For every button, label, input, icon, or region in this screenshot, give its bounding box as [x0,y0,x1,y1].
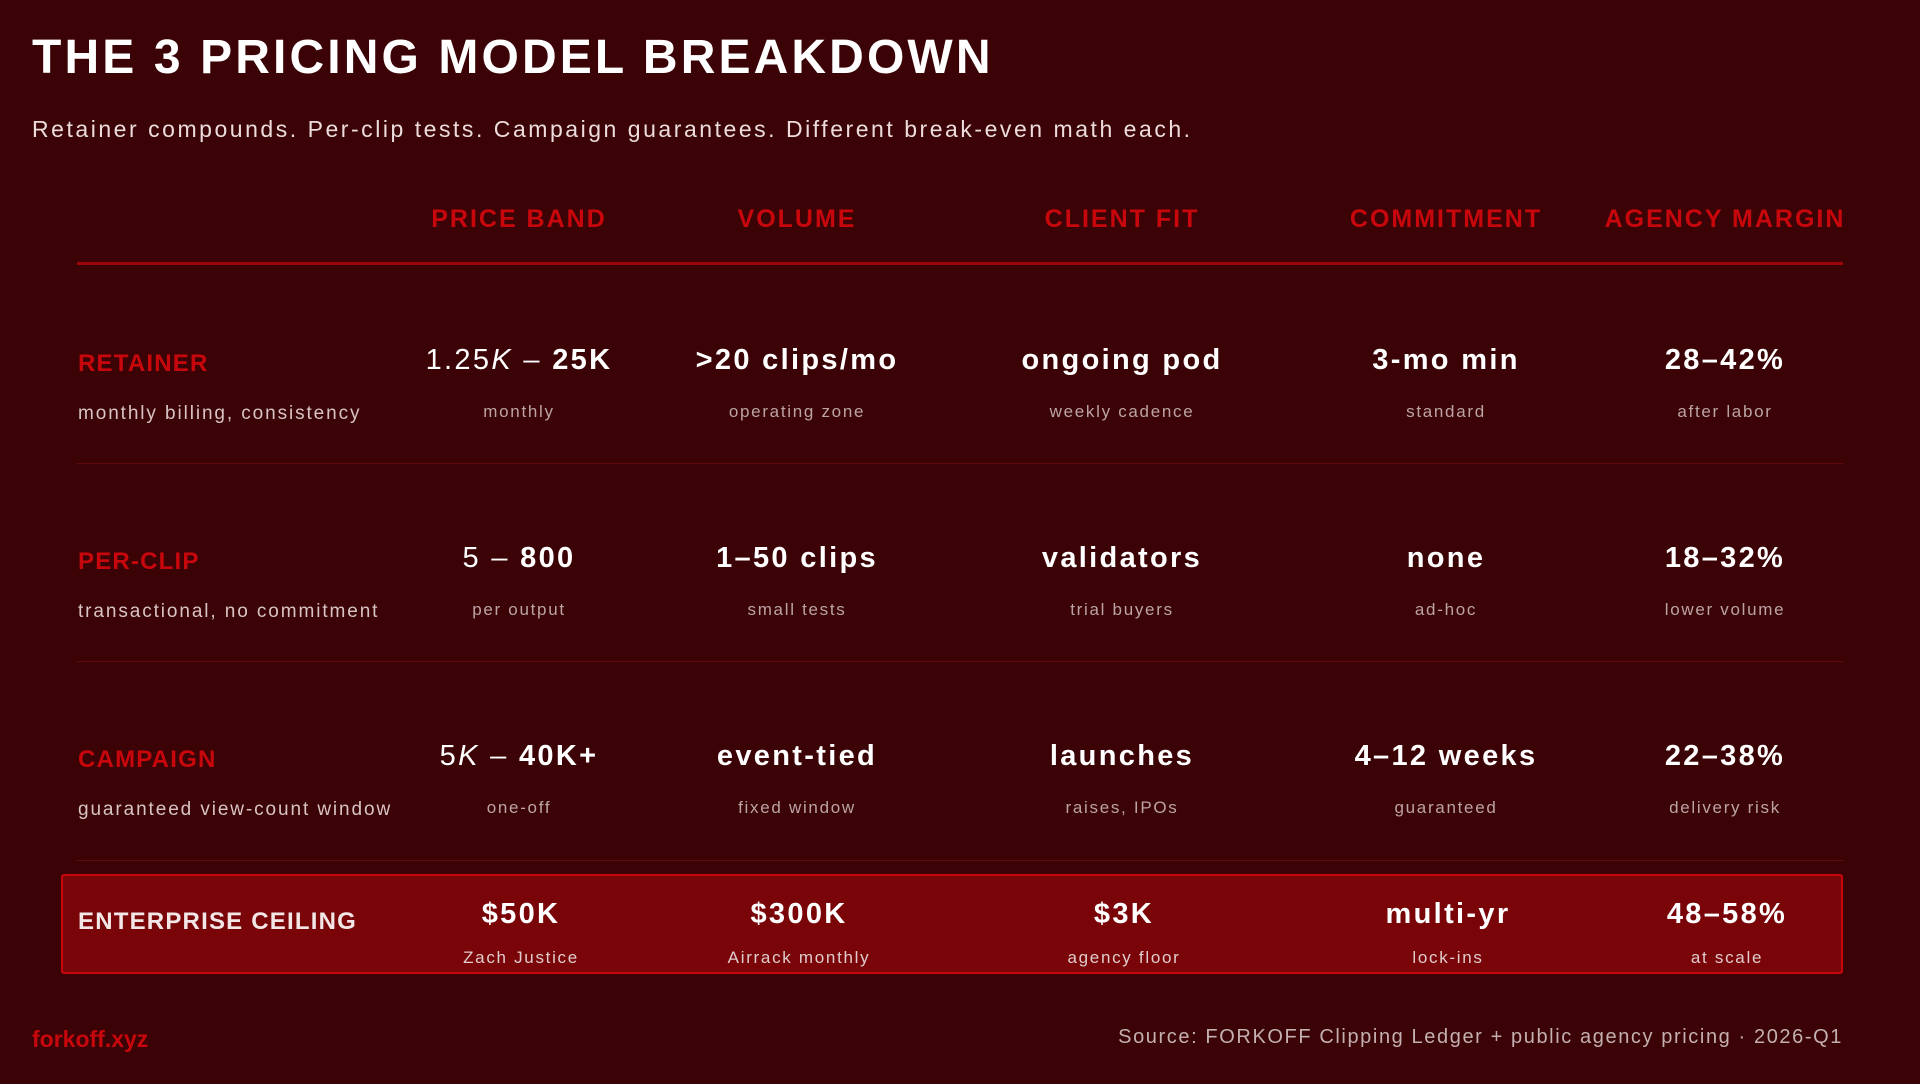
row: retainer: 28–42% [1665,344,1785,376]
row: retainer: standard [1406,402,1486,421]
row: per-clip: ad-hoc [1415,600,1477,619]
column headers: CLIENT FIT [1045,205,1199,233]
enterprise ceiling highlight row: 48–58% [1667,898,1787,930]
row: per-clip: PER-CLIP [78,548,200,575]
column headers: AGENCY MARGIN [1605,205,1845,233]
row: per-clip: trial buyers [1070,600,1174,619]
row: retainer: 1.25K – 25K [426,344,612,376]
enterprise ceiling highlight row: $300K [750,898,848,930]
title: THE 3 PRICING MODEL BREAKDOWN [32,31,994,84]
row: retainer: after labor [1677,402,1773,421]
row: per-clip: 1–50 clips [716,542,878,574]
row: retainer: monthly billing, consistency [78,403,361,424]
row: campaign: event-tied [717,740,877,772]
row: campaign: 22–38% [1665,740,1785,772]
footer brand: forkoff.xyz [32,1026,148,1052]
row: per-clip: 5 – 800 [462,542,576,574]
row: campaign [78,740,1785,820]
enterprise ceiling highlight row: lock-ins [1412,948,1484,967]
row: per-clip [78,542,1785,622]
column headers: COMMITMENT [1350,205,1542,233]
enterprise ceiling highlight row: $3K [1094,898,1154,930]
enterprise ceiling highlight row: ENTERPRISE CEILING [78,908,357,935]
row: per-clip: small tests [748,600,846,619]
row: retainer: RETAINER [78,350,208,377]
row: retainer [78,344,1785,424]
row: retainer: operating zone [729,402,865,421]
column headers: PRICE BAND [431,205,607,233]
enterprise ceiling highlight row: at scale [1691,948,1763,967]
row: campaign: 4–12 weeks [1355,740,1537,772]
enterprise ceiling highlight row: $50K [482,898,560,930]
column headers: VOLUME [738,205,856,233]
row: per-clip: validators [1042,542,1202,574]
row: retainer: 3-mo min [1372,344,1520,376]
row: campaign: fixed window [738,798,856,817]
row: per-clip: per output [472,600,566,619]
row: retainer: monthly [483,402,555,421]
row: campaign: 5K – 40K+ [440,740,598,772]
row: campaign: guaranteed [1394,798,1498,817]
row: per-clip: none [1407,542,1485,574]
row: retainer: weekly cadence [1050,402,1194,421]
enterprise ceiling highlight row: Airrack monthly [728,948,870,967]
row: per-clip: lower volume [1665,600,1785,619]
row: campaign: delivery risk [1669,798,1781,817]
row: per-clip: 18–32% [1665,542,1785,574]
subtitle: Retainer compounds. Per-clip tests. Campaign guarantees. Different break-even math each. [32,116,1193,142]
row: campaign: launches [1050,740,1194,772]
enterprise ceiling highlight row: agency floor [1067,948,1181,967]
row: campaign: raises, IPOs [1066,798,1178,817]
row: retainer: >20 clips/mo [696,344,898,376]
footer source: Source: FORKOFF Clipping Ledger + public agency pricing · 2026-Q1 [1118,1026,1843,1048]
row: per-clip: transactional, no commitment [78,601,379,622]
row: campaign: guaranteed view-count window [78,799,392,820]
enterprise ceiling highlight row [61,874,1843,974]
column headers [431,205,1845,233]
row: campaign: one-off [487,798,551,817]
row: campaign: CAMPAIGN [78,746,216,773]
enterprise ceiling highlight row: Zach Justice [463,948,579,967]
row: retainer: ongoing pod [1021,344,1223,376]
enterprise ceiling highlight row: multi-yr [1386,898,1510,930]
